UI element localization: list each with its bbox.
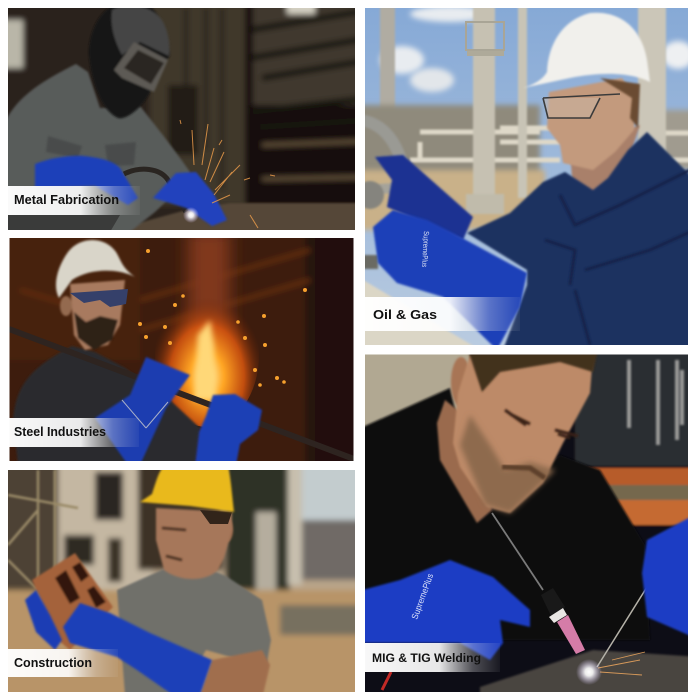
label: oil and gas: Oil & Gas: [373, 307, 437, 322]
panel: construction: [8, 470, 355, 692]
foundry background: [10, 238, 354, 461]
filler wire: [597, 587, 647, 667]
neck: [437, 400, 492, 523]
coverall folds: [545, 170, 690, 345]
workshop background: [8, 8, 355, 224]
weld sparks: [598, 652, 645, 675]
front glove: [63, 603, 212, 695]
fire core: [194, 320, 216, 400]
welding torch: [124, 169, 186, 212]
scaffolding: [8, 470, 78, 590]
label: steel industries: Steel Industries: [14, 425, 106, 439]
furnace sparks: [138, 249, 307, 387]
eyes and brows: [505, 410, 578, 438]
tig white ring: [549, 608, 567, 623]
worker neck and face: [156, 508, 232, 579]
right glove: [642, 512, 700, 640]
lower shirt dark strip: [8, 215, 120, 230]
tig pink nozzle: [557, 615, 585, 654]
label: metal fabrication: Metal Fabrication: [14, 193, 119, 207]
ear: [451, 357, 471, 407]
label band: [8, 186, 140, 215]
worker shirt: [117, 565, 271, 695]
gripping glove: [195, 394, 262, 465]
panel: mig and tig welding: [355, 345, 700, 700]
safety glasses: [543, 94, 620, 118]
red cable: [382, 672, 391, 690]
brick: [32, 553, 113, 650]
label band: [365, 643, 500, 672]
raised glove: [95, 357, 190, 465]
worker coat: [13, 346, 200, 465]
worker ear: [228, 520, 234, 542]
face: [453, 355, 593, 513]
safety glasses: [70, 289, 128, 307]
valve wheel: [356, 120, 406, 262]
refinery background: [350, 0, 700, 350]
front glove: [373, 210, 527, 350]
back glove: [375, 155, 473, 240]
shirt shading and pockets: [46, 136, 136, 166]
hair: [468, 350, 598, 392]
face shadows: [162, 528, 186, 560]
mustache: [502, 467, 545, 478]
hair: [200, 510, 232, 524]
welding sparks: [180, 120, 275, 228]
steel rod: [9, 329, 354, 459]
work table: [132, 202, 355, 230]
right glove: [153, 172, 227, 226]
panel: metal fabrication: [8, 8, 355, 230]
white hard hat: [523, 13, 650, 88]
label band: [365, 297, 520, 331]
worker shirt: [0, 64, 190, 232]
smoke column: [188, 230, 230, 360]
welding helmet: [89, 4, 170, 118]
back glove: [25, 590, 62, 650]
tig torch collet: [541, 588, 565, 618]
glove logo: SupremePlus: [409, 572, 435, 621]
yellow hard hat: [140, 466, 234, 512]
label: construction: Construction: [14, 656, 92, 670]
steel plate: [480, 650, 700, 700]
arc flash: [576, 659, 602, 685]
panel: oil and gas: [350, 0, 700, 350]
hair: [600, 78, 640, 128]
label: mig and tig welding: MIG & TIG Welding: [372, 651, 481, 665]
furnace fire: [156, 308, 259, 426]
worker face: [547, 78, 636, 170]
black shirt: [355, 388, 650, 640]
tig tungsten rod: [492, 513, 543, 590]
worker face and beard: [60, 280, 125, 350]
worker neck: [570, 125, 640, 195]
weld flash: [184, 208, 198, 222]
label band: [9, 418, 139, 447]
wrenches: [629, 360, 682, 445]
construction site background: [8, 470, 355, 692]
glove logo: SupremePlus: [420, 231, 431, 268]
workshop background: [355, 345, 700, 700]
label band: [8, 649, 118, 677]
panel: steel industries: [10, 238, 354, 461]
navy coverall: [467, 132, 695, 350]
beard: [460, 415, 555, 513]
forearm: [200, 650, 270, 695]
left glove: [35, 156, 138, 205]
left glove: [355, 560, 530, 660]
white hard hat: [56, 240, 135, 298]
